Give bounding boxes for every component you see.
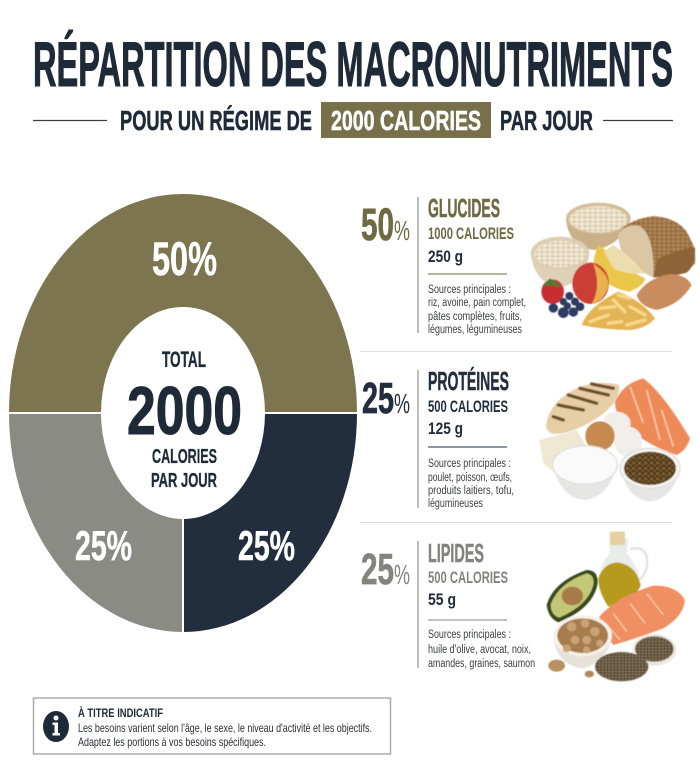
note text: Adaptez les portions à vos besoins spécifiques. <box>78 735 266 749</box>
sources glucides: Sources principales : <box>428 284 511 296</box>
center total text: PAR JOUR <box>151 470 217 492</box>
center hole <box>101 307 265 519</box>
sources glucides: riz, avoine, pain complet, <box>428 297 526 309</box>
note text <box>78 705 372 749</box>
heading proteines: PROTÉINES <box>428 366 509 396</box>
segment: lipides 25% <box>9 413 183 632</box>
icon: info <box>43 711 69 742</box>
center total text: TOTAL <box>162 347 206 372</box>
row: proteines: 500 CALORIES <box>428 397 508 416</box>
percent 25 navy: 25 <box>362 374 394 423</box>
segment: glucides 50% <box>9 194 357 413</box>
center total text: CALORIES <box>152 446 217 468</box>
note box <box>34 698 390 754</box>
sources proteines: produits laitiers, tofu, <box>428 485 514 497</box>
sources lipides: huile d'olive, avocat, noix, <box>428 644 531 656</box>
note text: À TITRE INDICATIF <box>78 705 163 720</box>
label 25% lipides: 25% <box>75 522 132 569</box>
center total text <box>127 347 242 492</box>
row: glucides: 250 g <box>428 247 463 266</box>
row: glucides <box>361 193 695 336</box>
divider <box>360 522 672 524</box>
sources glucides <box>428 284 526 336</box>
row: lipides: 500 CALORIES <box>428 568 508 587</box>
segment dividers <box>7 413 359 634</box>
row: lipides: 55 g <box>428 590 456 609</box>
sources proteines: Sources principales : <box>428 458 511 470</box>
sources proteines <box>428 458 514 510</box>
row: lipides: % <box>394 559 410 590</box>
subtitle: POUR UN RÉGIME DE <box>120 105 312 136</box>
donut chart <box>7 194 359 634</box>
row: glucides: 1000 CALORIES <box>428 224 514 243</box>
heading glucides: GLUCIDES <box>428 193 500 223</box>
label 25% proteines: 25% <box>238 522 295 569</box>
sources lipides: Sources principales : <box>428 629 511 641</box>
center total text: 2000 <box>127 373 242 449</box>
heading lipides: LIPIDES <box>428 538 484 568</box>
row: lipides <box>361 532 685 681</box>
percent 50: 50 <box>361 199 394 250</box>
sources glucides: pâtes complètes, fruits, <box>428 311 522 323</box>
segment: protéines 25% <box>183 413 357 632</box>
subtitle <box>33 102 673 138</box>
subtitle: PAR JOUR <box>500 105 593 136</box>
food illustration: fats <box>547 532 685 681</box>
row: proteines <box>362 366 690 510</box>
row: glucides: % <box>394 215 410 246</box>
percent 25 gray: 25 <box>361 545 394 594</box>
label 50%: 50% <box>152 232 217 285</box>
food illustration: carbs <box>531 203 695 330</box>
row: proteines: % <box>394 388 410 419</box>
divider <box>360 350 672 352</box>
note text: Les besoins varient selon l'âge, le sexe, le niveau d'activité et les objectifs. <box>78 721 372 735</box>
food illustration: proteins <box>539 378 690 502</box>
sources proteines: légumineuses <box>428 498 483 510</box>
subtitle: 2000 CALORIES <box>331 105 481 136</box>
row: proteines: 125 g <box>428 419 463 438</box>
sources proteines: poulet, poisson, œufs, <box>428 472 512 484</box>
sources lipides: amandes, graines, saumon <box>428 658 535 670</box>
sources glucides: légumes, légumineuses <box>428 324 522 336</box>
sources lipides <box>428 629 535 670</box>
